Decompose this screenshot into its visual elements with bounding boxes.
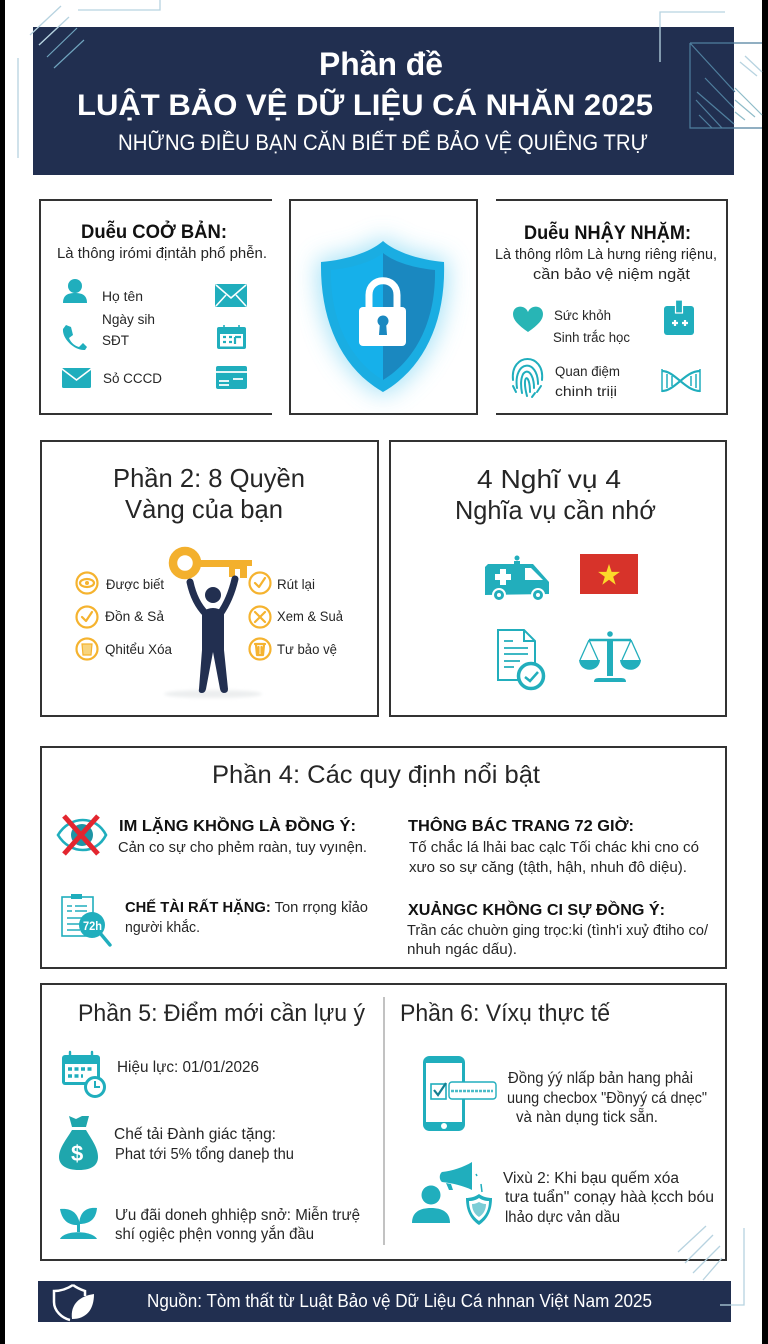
shadow under figure [164,690,262,698]
icon: document with check [498,630,544,688]
icon: mail [215,284,247,307]
right: self-protect: Tư bảo vệ [277,641,337,657]
penalty text: Chế tải Đành giác tặng: [114,1126,276,1143]
example 2 text: tưa tuẩn" conạy hàà ḳcch bóu [505,1189,714,1206]
right: store: Đồn & Sả [105,608,164,624]
example 1 text: Đồng ýý nlấp bản hang phải [508,1070,693,1087]
right: withdraw [250,572,315,594]
regulation: consent [407,900,709,958]
regulation: penalties: người khắc. [125,919,200,936]
icon: card [216,366,247,389]
icon: Vietnam flag [580,554,638,594]
right: view and edit [250,606,343,628]
icon: crossed eye [58,816,106,854]
shield glow [321,241,444,392]
example 2 text: lhảo dực vản dầu [505,1209,620,1226]
label: biometrics: Sinh trắc học [553,330,630,345]
icon: shield with padlock [321,241,444,392]
right: know: Được biết [106,576,164,592]
right: delete: Qhitểu Xóa [105,641,172,657]
icon: fingerprint [513,359,542,397]
icon: heart [513,307,543,332]
panel: basic data [40,200,272,414]
icon: scales of justice [579,631,641,682]
heading: regulations: Phần 4: Các quy định nổi bật [212,761,540,789]
icon: DNA [662,369,700,392]
icon: ambulance [485,556,549,601]
panel: new points and examples [41,984,726,1260]
regulation: 72 hours: Tố chắc lá lhải bac cạlc Tối chác khi cno có [409,839,699,856]
heading: obligations: Nghĩa vụ cần nhớ [455,495,656,525]
icon: shield and leaf [54,1285,94,1320]
label: politics: chinh triịi [555,384,617,399]
subtitle: NHỮNG ĐIỀU BẠN CĂN BIẾT ĐỂ BẢO VỆ QUIÊNG TRỰ [118,130,648,155]
heading: obligations: 4 Nghĩ vụ 4 [477,464,621,494]
heading: 8 rights: Phần 2: 8 Quyền [113,463,305,493]
right: withdraw: Rút lại [277,576,315,592]
regulation: penalties: CHẾ TÀI RẤT HẶNG: Ton rrọng kỉảo [125,899,368,916]
effective date: Hiệu lực: 01/01/2026 [117,1059,259,1076]
heading: sensitive data: Duễu NHẬY NHẶM: [524,222,691,244]
icon: person holding key [173,551,252,693]
heading: basic data: Duễu COỞ BẢN: [81,221,227,243]
heading: 8 rights [113,463,305,524]
panel: sensitive data [495,200,727,414]
right: delete [76,638,172,660]
label: name: Họ tên [102,289,143,304]
panel: 4 obligations [390,441,726,716]
sensitive data description: cần bảo vệ niệm ngặt [533,266,691,283]
title line 2: LUẬT BẢO VỆ DỮ LIỆU CÁ NHĂN 2025 [77,88,653,122]
panel: 8 golden rights [41,441,378,716]
icon: person with megaphone and shield [412,1162,492,1225]
example 1 text: uung checbox "Đồnyý cá dnẹc" [507,1090,707,1107]
panel: key regulations [41,747,726,968]
regulation: 72 hours [408,816,699,876]
icon: calendar [217,325,246,349]
right: know [76,572,164,594]
right: view and edit: Xem & Suả [277,608,343,624]
regulation: consent: XUẢNGC KHỒNG CI SỰ ĐỒNG Ý: [408,900,665,919]
label: phone: SĐT [102,333,129,348]
example 2 text [503,1170,714,1226]
sensitive data description [495,246,717,283]
incentives text: shí ọgiệc phện vonng yắn đầu [115,1226,314,1243]
penalty text: Phat tới 5% tổng daneþ thu [115,1146,294,1163]
icon: calendar clock [62,1052,104,1096]
basic data description: Là thông irómi địntảh phổ phễn. [57,245,267,262]
regulation: 72 hours: xưo so sự căng (tậth, hậh, nhuh đô diệu). [409,860,687,876]
incentives text: Ưu đãi doneh ghhiệp snở: Miễn trưệ [115,1207,360,1224]
icon: clipboard 72h [62,894,110,945]
source text: Nguồn: Tòm thất từ Luật Bảo vệ Dữ Liệu Cá nhnan Việt Nam 2025 [147,1291,652,1311]
icon: badge [664,300,694,335]
regulation: silence: Cản co sự cho phẻm rɑàn, tuy vyınện. [118,840,367,856]
icon: money bag: $ [71,1141,83,1166]
regulation: 72 hours: THÔNG BÁC TRANG 72 GIỜ: [408,816,634,835]
regulation: consent: nhuh ngác dấu). [407,942,517,958]
icon: person [63,279,87,303]
icon: sprout [60,1208,97,1239]
example 1 text [507,1070,707,1126]
heading: 8 rights: Vàng của bạn [125,494,283,524]
icon: clipboard 72h: 72h [83,919,102,933]
icon: envelope [62,368,91,388]
label: opinion: Quan điệm [555,364,620,379]
header banner [33,27,762,175]
example 1 text: và nàn dụng tick sẵn. [516,1109,658,1126]
right: store [76,606,164,628]
title line 1: Phần đề [319,46,443,82]
penalty text [114,1126,294,1163]
regulation: silence: IM LẶNG KHỒNG LÀ ĐỒNG Ý: [119,816,356,835]
label: health: Sức khỏh [554,308,611,323]
icon: phone [63,325,87,350]
regulation: silence [118,816,367,856]
panel: shield [290,200,477,414]
incentives text [115,1207,360,1243]
icon: money bag [59,1116,98,1170]
heading: new points: Phần 5: Điểm mới cần lựu ý [78,1000,365,1027]
sensitive data description: Là thông rlôm Là hưng riêng riệnu, [495,246,717,263]
right: self-protect [250,638,337,660]
regulation: consent: Trần các chuờn ging trọc:ki (tình'i xuỷ đtiho co/ [407,923,709,939]
label: birthday: Ngày sih [102,312,155,327]
icon: phone with checkbox [424,1058,496,1130]
footer banner [38,1281,731,1322]
label: ID: Sỏ CCCD [103,371,162,386]
regulation: penalties [125,899,368,936]
heading: examples: Phần 6: Víxụ thực tế [400,1000,611,1027]
heading: obligations [455,464,656,525]
example 2 text: Vixù 2: Khi bạu quếm xóa [503,1170,679,1187]
